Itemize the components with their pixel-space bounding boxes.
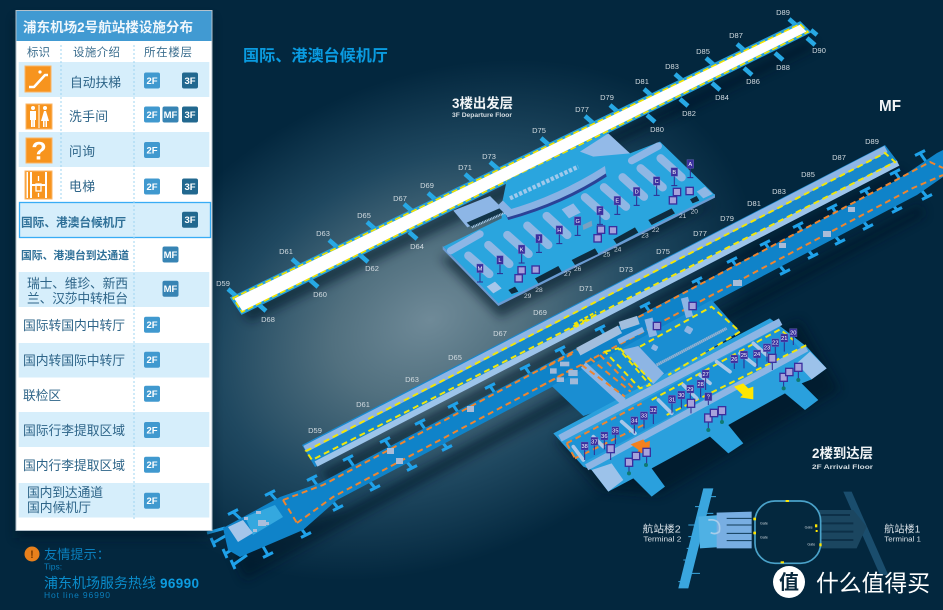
row labels: 国内转国际中转厅 <box>23 353 125 368</box>
gate islands <box>573 343 767 460</box>
floor badges: 2F <box>146 146 158 156</box>
3F gate labels: D68 <box>261 315 275 324</box>
gate signs: 20 <box>790 331 796 337</box>
stop labels: Gate <box>760 522 768 526</box>
3F gate labels: D80 <box>650 125 664 134</box>
row bands <box>19 62 209 518</box>
floor badges: 2F <box>146 426 158 436</box>
watermark <box>773 566 930 598</box>
tips and hotline: 96990 <box>160 576 199 591</box>
floor badges: 2F <box>146 110 158 121</box>
3F gate labels: D67 <box>393 194 407 203</box>
gate numbers: 27 <box>564 271 572 278</box>
gate openings <box>508 196 699 294</box>
MF gate labels: D89 <box>865 137 879 146</box>
gate signs A to M: D <box>635 190 639 196</box>
heading: 2F arrival floor: 2F Arrival Floor <box>812 464 874 471</box>
3F gate labels: D81 <box>635 77 649 86</box>
location mini map <box>643 488 921 588</box>
gate signs A to M: L <box>498 258 502 264</box>
gate numbers: 29 <box>524 293 532 300</box>
label: terminal 1: Terminal 1 <box>884 537 921 544</box>
MF gate labels: D73 <box>619 265 633 274</box>
gate signs: ? <box>707 395 710 401</box>
yellow dashed zones <box>605 307 740 388</box>
icon: information <box>26 138 52 166</box>
row labels: 电梯 <box>69 179 95 194</box>
gate signs: 26 <box>731 357 737 363</box>
heading: 2F arrival floor <box>812 445 874 471</box>
icon: escalator <box>25 66 51 92</box>
tips and hotline: Hot line 96990 <box>44 590 110 600</box>
MF gate labels: D87 <box>832 153 846 162</box>
highlighted row <box>20 202 210 238</box>
north hall floor <box>552 300 740 416</box>
row labels: 瑞士、维珍、新西 <box>27 276 128 291</box>
heading: international lounge: 国际、港澳台候机厅 <box>243 46 388 65</box>
icon: tips: ! <box>30 549 34 561</box>
floor badges: MF <box>164 284 178 295</box>
3F gate labels: D62 <box>365 264 379 273</box>
corner blocks <box>592 463 623 492</box>
row labels: 兰、汉莎中转柜台 <box>27 291 128 306</box>
3F gate labels: D82 <box>682 109 696 118</box>
MF gate labels: D75 <box>656 247 670 256</box>
floor badges: 2F <box>146 496 158 507</box>
MF gate labels: D79 <box>720 214 734 223</box>
gate signs A to M: H <box>557 228 561 234</box>
orange exit arrow <box>631 439 650 453</box>
3F gate labels: D88 <box>776 63 790 72</box>
row labels: 国际转国内中转厅 <box>23 318 125 333</box>
south hall floor with piers <box>553 318 827 497</box>
gate signs: 27 <box>703 372 709 378</box>
panel header <box>16 11 212 41</box>
3F gate labels: D79 <box>600 93 614 102</box>
3F gate labels: D69 <box>420 181 434 190</box>
3F gate labels: D75 <box>532 126 546 135</box>
panel: facility legend <box>16 10 212 538</box>
heading: 3F departure floor: 3F Departure Floor <box>452 112 512 119</box>
gate signs A to M: E <box>615 199 619 205</box>
gate signs: 21 <box>781 336 787 342</box>
MF gate labels: D83 <box>772 187 786 196</box>
gate signs: 34 <box>631 419 637 425</box>
icon: tips <box>24 546 40 562</box>
stop labels <box>760 522 815 546</box>
icon: elevator <box>25 171 52 199</box>
gate signs A to M: B <box>672 170 676 176</box>
icon: restrooms <box>26 104 52 129</box>
gate signs A to M: M <box>478 266 483 272</box>
row labels: 问询 <box>69 144 95 159</box>
floor badges: 2F <box>146 182 158 193</box>
row labels: 国际、港澳台到达通道 <box>21 248 129 262</box>
panel header: 浦东机场2号航站楼设施分布 <box>23 19 193 35</box>
gate signs A to M <box>477 160 694 282</box>
gate numbers: 25 <box>603 252 611 259</box>
3F departure floor plan <box>443 133 715 306</box>
3F gate labels: D59 <box>216 279 230 288</box>
gate signs A to M: K <box>520 247 524 253</box>
3F gate labels: D84 <box>715 93 729 102</box>
gate signs: 28 <box>698 382 704 388</box>
MF gate labels: D71 <box>579 284 593 293</box>
central hall <box>505 170 607 220</box>
gate signs: 37 <box>591 439 597 445</box>
gate signs <box>581 329 798 473</box>
connector to pier <box>453 196 504 227</box>
2F arrival floor plan <box>540 297 827 497</box>
label: terminal 1: 航站楼1 <box>884 523 921 536</box>
lounge islands <box>468 158 682 274</box>
heading: 2F arrival floor: 2楼到达层 <box>812 445 873 461</box>
row labels: 联检区 <box>23 388 61 403</box>
tips and hotline: Tips: <box>44 562 62 572</box>
watermark: 什么值得买 <box>816 570 930 596</box>
floor base <box>443 194 715 306</box>
3F gate labels: D86 <box>746 77 760 86</box>
gate numbers: 22 <box>652 227 660 234</box>
3F gate labels: D85 <box>696 47 710 56</box>
gate signs: 31 <box>669 397 675 403</box>
gate signs: 24 <box>754 352 760 358</box>
heading: 3F departure floor: 3楼出发层 <box>452 95 513 111</box>
gate numbers: 23 <box>641 232 649 239</box>
gate signs: 29 <box>687 387 693 393</box>
gate signs: 32 <box>650 408 656 414</box>
teal floor markers <box>627 378 800 475</box>
3F gate labels: D87 <box>729 31 743 40</box>
upper and lower halls <box>560 322 781 438</box>
stop labels: Gate <box>760 535 768 539</box>
gate numbers: 21 <box>679 213 687 220</box>
column headers: 所在楼层 <box>144 45 192 59</box>
gate signs: 36 <box>601 434 607 440</box>
column headers: 设施介绍 <box>73 45 120 59</box>
gate stubs <box>228 19 817 311</box>
MF pier <box>302 145 898 467</box>
gate numbers: 26 <box>574 266 582 273</box>
tips and hotline <box>24 546 199 600</box>
watermark: 值 <box>779 571 799 594</box>
gate signs: 22 <box>772 341 778 347</box>
tips and hotline: 浦东机场服务热线 <box>44 575 156 591</box>
loop stops <box>753 500 822 563</box>
gate signs A to M: J <box>538 237 541 243</box>
label: terminal 1 <box>884 523 921 544</box>
terminal 2 <box>678 488 752 588</box>
row labels: 国内到达通道 <box>27 485 103 500</box>
column headers <box>27 45 192 59</box>
MF gate labels: D59 <box>308 426 322 435</box>
3F gate labels: D90 <box>812 46 826 55</box>
label: terminal 2: Terminal 2 <box>643 537 681 544</box>
column headers: 标识 <box>27 46 50 59</box>
heading: 3F departure floor <box>452 95 513 119</box>
row labels: 国内行李提取区域 <box>23 458 125 473</box>
floor badges: 3F <box>184 215 196 226</box>
row labels <box>21 75 129 515</box>
floor badges <box>144 72 198 509</box>
north hall structures <box>583 297 693 402</box>
gate numbers: 24 <box>614 246 622 253</box>
gate numbers <box>524 208 698 300</box>
gate signs A to M: A <box>688 162 692 168</box>
3F gate labels: D60 <box>313 290 327 299</box>
3F gate labels: D89 <box>776 8 790 17</box>
3F gate labels <box>216 8 826 324</box>
stop labels: Gate <box>805 526 813 530</box>
3F gate labels: D63 <box>316 229 330 238</box>
icon: information: ? <box>31 138 47 166</box>
MF gate labels: D77 <box>693 229 707 238</box>
floor badges: 3F <box>184 110 196 121</box>
stop labels: Gate <box>807 542 815 546</box>
facility markers <box>515 187 693 282</box>
end plate and square <box>245 505 283 535</box>
label: terminal 2: 航站楼2 <box>643 523 681 536</box>
3F gate labels: D73 <box>482 152 496 161</box>
3F concourse pier with gate stubs <box>228 19 817 313</box>
floor badges: 2F <box>146 76 158 87</box>
MF gate labels: D61 <box>356 400 370 409</box>
row labels: 洗手间 <box>69 109 108 124</box>
3F gate labels: D65 <box>357 211 371 220</box>
3F gate labels: D61 <box>279 247 293 256</box>
floor badges: 2F <box>146 320 158 331</box>
3F gate labels: D83 <box>665 62 679 71</box>
MF gate labels: D65 <box>448 353 462 362</box>
MF gate labels <box>308 137 879 435</box>
service blocks <box>550 362 578 384</box>
shadows under the terminal structures <box>228 40 925 580</box>
floor badges: MF <box>164 250 178 261</box>
MF gate labels: D81 <box>747 199 761 208</box>
gate signs: 33 <box>641 414 647 420</box>
yellow exit arrow <box>734 383 753 399</box>
row labels: 自动扶梯 <box>70 75 121 90</box>
gate numbers: 28 <box>535 287 543 294</box>
facility markers <box>607 302 802 466</box>
MF gate labels: D69 <box>533 308 547 317</box>
floor badges: 2F <box>146 355 158 366</box>
gate signs: 38 <box>582 444 588 450</box>
label: terminal 2 <box>643 523 681 544</box>
3F gate labels: D71 <box>458 163 472 172</box>
row labels: 国际行李提取区域 <box>23 423 125 438</box>
3F gate labels: D64 <box>410 242 424 251</box>
gate signs: 35 <box>612 429 618 435</box>
orange dashed route <box>283 162 943 523</box>
row labels: 国际、港澳台候机厅 <box>21 216 126 230</box>
corridor kiosks <box>387 207 855 464</box>
orange dashed zones <box>540 353 643 458</box>
floor badges: 3F <box>184 182 196 193</box>
floor badges: 2F <box>146 460 158 471</box>
MF gate labels: D63 <box>405 375 419 384</box>
gate signs: 25 <box>741 353 747 359</box>
heading: MF floor: MF <box>879 98 901 115</box>
gate numbers: 20 <box>691 208 698 215</box>
gate signs A to M: F <box>598 209 602 215</box>
gate signs A to M: C <box>655 179 659 185</box>
gate signs: 30 <box>678 393 684 399</box>
tips and hotline: 友情提示： <box>44 547 110 562</box>
MF gate labels: D67 <box>493 329 507 338</box>
rail loop <box>755 501 821 563</box>
row labels: 国内候机厅 <box>27 500 91 515</box>
gate signs A to M: G <box>575 219 580 225</box>
floor badges: MF <box>164 110 178 121</box>
terminal 1 <box>815 492 888 575</box>
floor badges: 3F <box>184 76 196 87</box>
3F gate labels: D77 <box>575 105 589 114</box>
MF gate labels: D85 <box>801 170 815 179</box>
apron corridor with aircraft stands <box>207 150 943 569</box>
floor badges: 2F <box>146 389 158 400</box>
gate signs: 23 <box>764 346 770 352</box>
side bars <box>451 146 658 251</box>
stands <box>207 150 932 569</box>
